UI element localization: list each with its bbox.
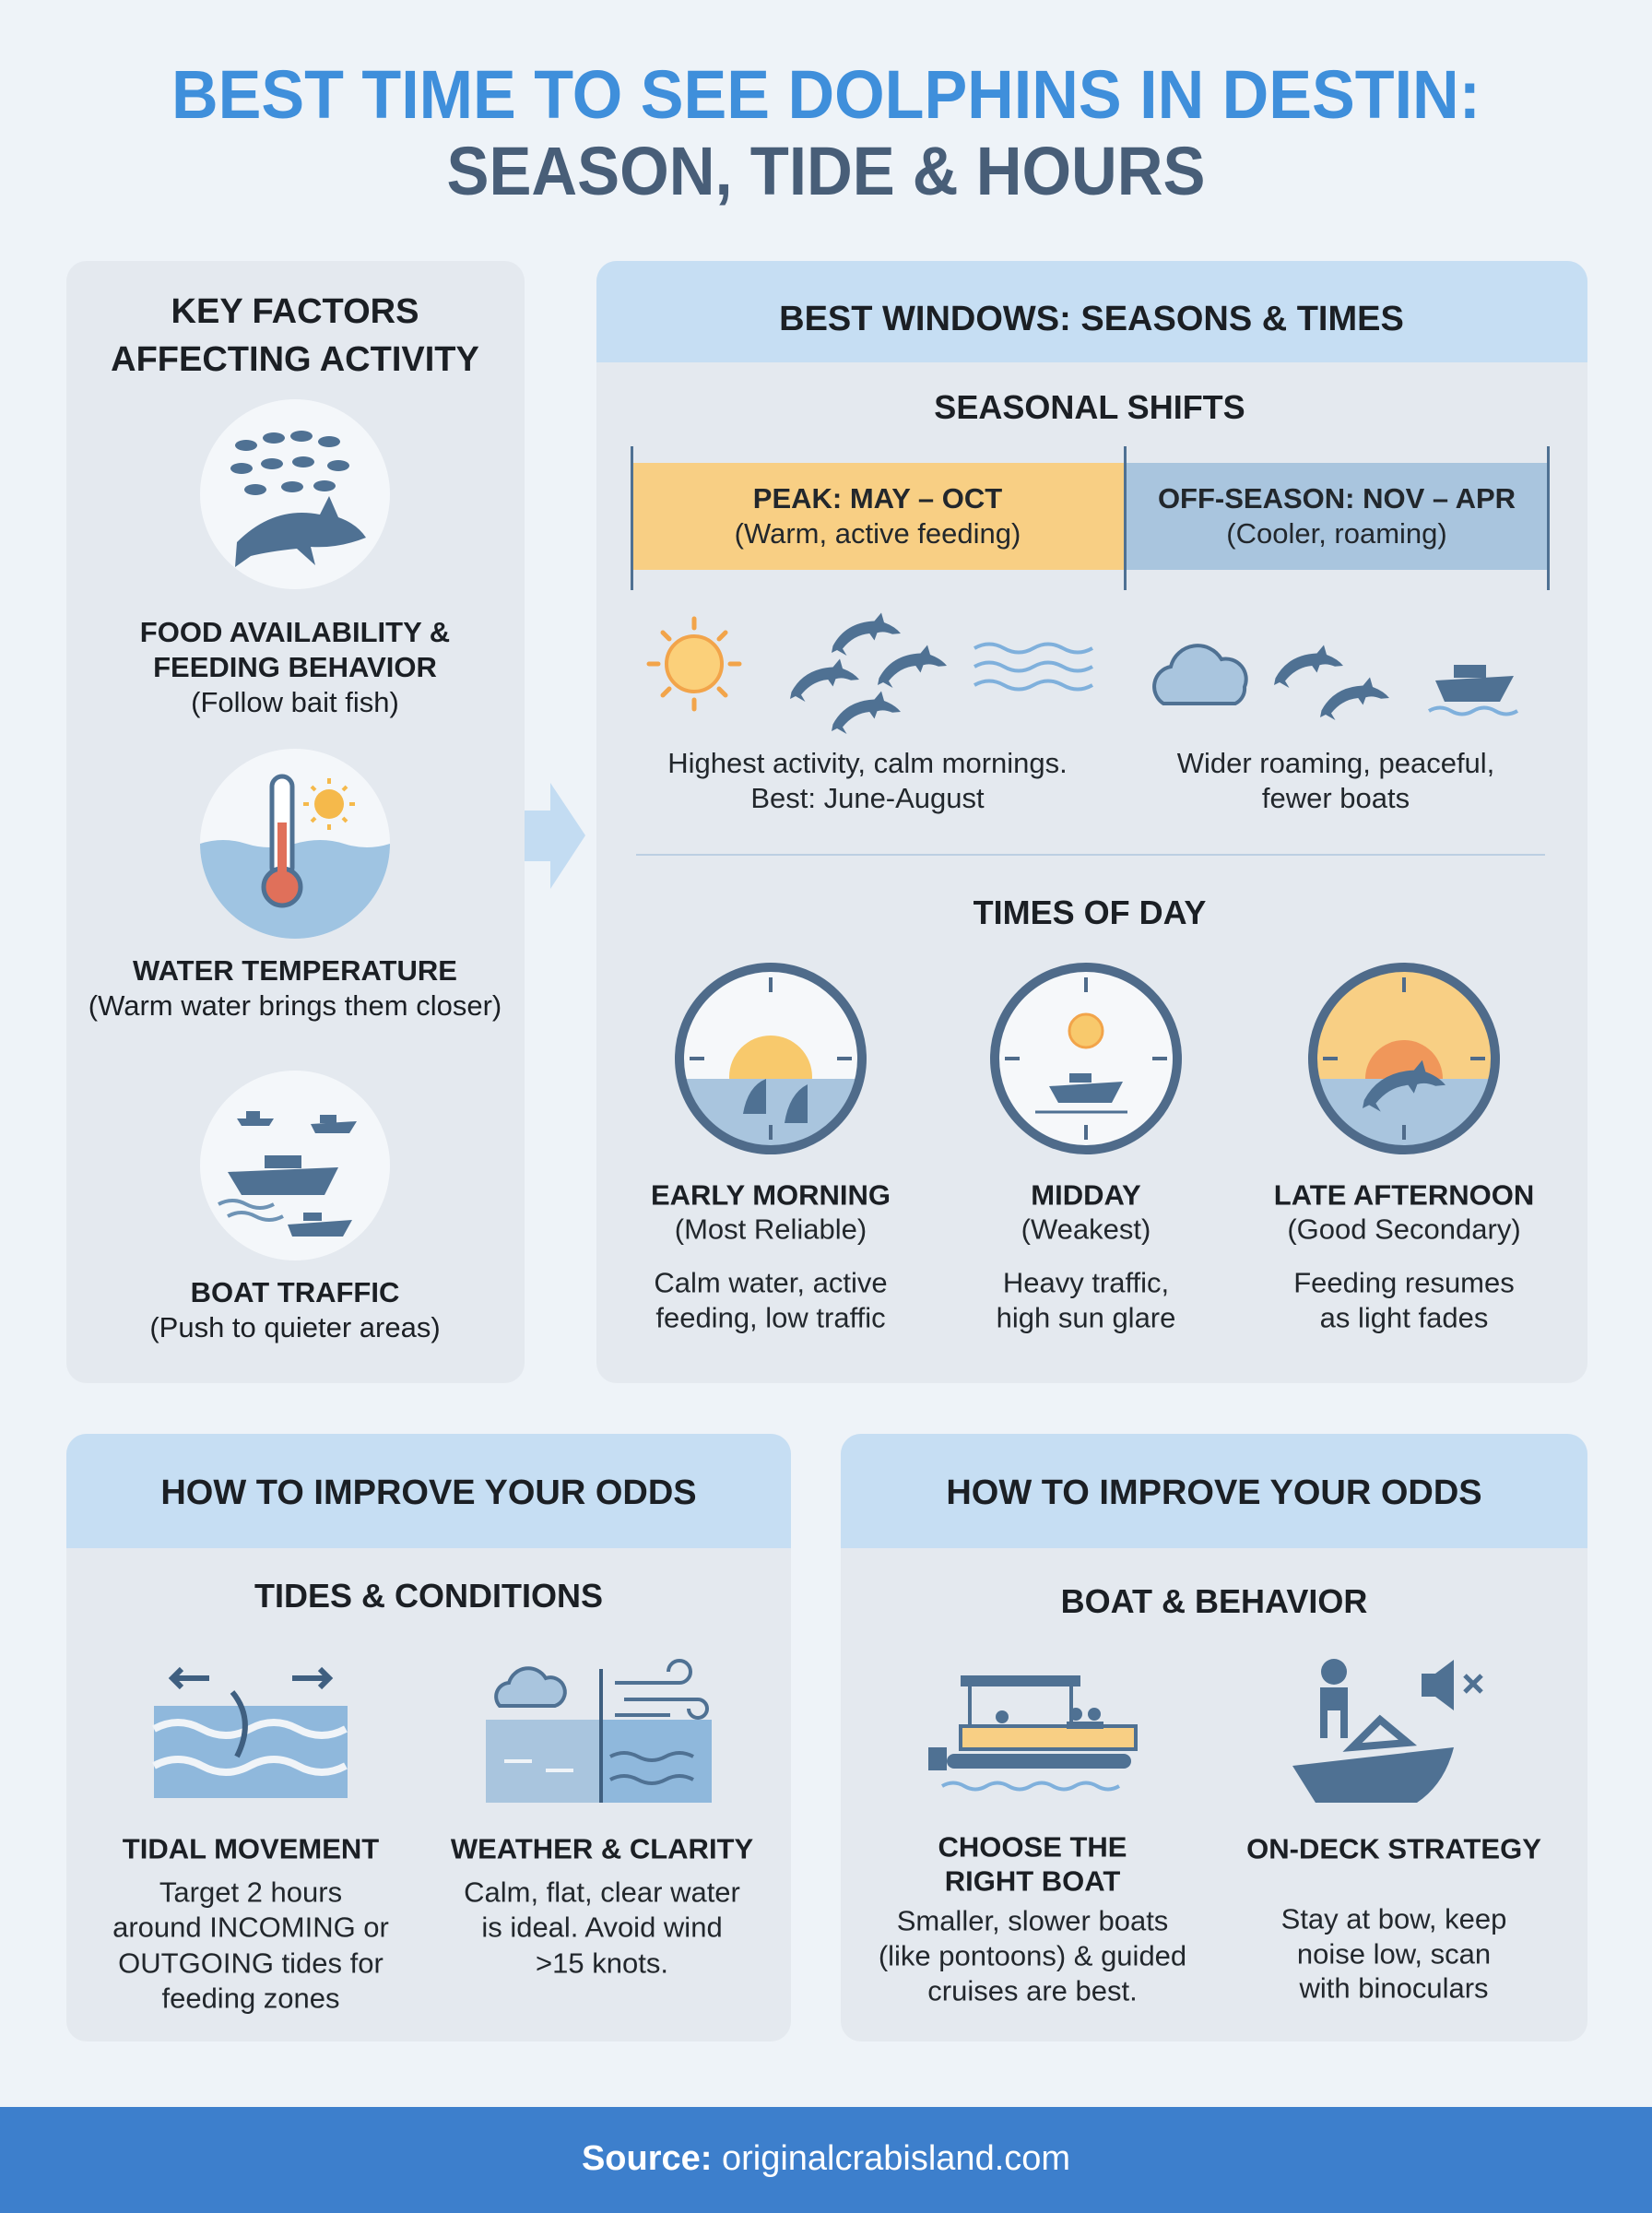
weather text: >15 knots. [536,1947,668,1979]
off-season label [1158,482,1516,550]
heading: key factors: AFFECTING ACTIVITY [111,340,479,379]
heading: HOW TO IMPROVE YOUR ODDS [946,1473,1482,1512]
title [171,56,1481,209]
weather text: is ideal. Avoid wind [481,1911,723,1944]
water temperature label [88,954,502,1022]
off-season description: fewer boats [1262,782,1410,814]
footer: source [0,2107,1652,2213]
choose the right boat text: cruises are best. [927,1975,1138,2006]
food label [140,616,450,718]
early morning label: Calm water, active [654,1267,888,1298]
clock: midday [990,963,1182,1154]
peak description: Best: June-August [750,782,985,814]
choose the right boat text: RIGHT BOAT [945,1864,1120,1898]
food label: (Follow bait fish) [191,686,399,718]
panel: boat & behavior [841,1434,1587,2041]
weather text: Calm, flat, clear water [464,1876,740,1909]
clock: early morning [675,963,867,1154]
off-season description [1176,747,1494,814]
tidal movement text: feeding zones [161,1982,340,2014]
heading: HOW TO IMPROVE YOUR ODDS [160,1473,697,1512]
icon: boats [200,1071,390,1260]
icon: tidal movement [153,1667,348,1798]
late afternoon label: Feeding resumes [1293,1267,1515,1298]
subheading: seasonal shifts: SEASONAL SHIFTS [934,388,1245,426]
off-season description: Wider roaming, peaceful, [1177,747,1494,779]
heading: key factors [111,292,479,379]
weather text: WEATHER & CLARITY [451,1833,753,1864]
panel: key factors [66,261,525,1383]
tidal movement text: TIDAL MOVEMENT [123,1833,379,1864]
peak label: PEAK: MAY – OCT [753,482,1002,515]
midday label: (Weakest) [1021,1213,1150,1245]
off-season label: (Cooler, roaming) [1226,517,1447,550]
choose the right boat text: (like pontoons) & guided [879,1940,1186,1971]
clock: late afternoon [1308,963,1500,1154]
off-season label: OFF-SEASON: NOV – APR [1158,482,1516,515]
tidal movement text [112,1833,389,2014]
early morning label: feeding, low traffic [655,1302,886,1333]
midday label: high sun glare [997,1302,1175,1333]
on-deck strategy text: ON-DECK STRATEGY [1246,1833,1541,1864]
food label: FEEDING BEHAVIOR [153,651,437,683]
heading: key factors: KEY FACTORS [171,292,419,331]
midday label [997,1178,1175,1333]
choose the right boat text [879,1831,1186,2006]
arrow [525,783,585,889]
peak description [667,747,1068,814]
early morning label: EARLY MORNING [651,1178,891,1212]
heading: best windows: BEST WINDOWS: SEASONS & TIMES [779,300,1404,338]
tidal movement text: OUTGOING tides for [118,1947,384,1979]
peak description: Highest activity, calm mornings. [667,747,1068,779]
subheading: BOAT & BEHAVIOR [1061,1582,1367,1620]
boat traffic label: (Push to quieter areas) [149,1311,441,1343]
water temperature label: (Warm water brings them closer) [88,989,502,1022]
on-deck strategy text: Stay at bow, keep [1281,1903,1506,1935]
boat traffic label [149,1276,441,1343]
subheading: times of day: TIMES OF DAY [974,893,1206,931]
on-deck strategy text: with binoculars [1299,1971,1489,2005]
on-deck strategy text [1246,1833,1541,2005]
icon: thermometer [200,749,390,939]
icon: fish school [200,399,390,589]
boat traffic label: BOAT TRAFFIC [191,1276,399,1308]
icon: weather & clarity [486,1659,712,1803]
late afternoon label: LATE AFTERNOON [1274,1178,1534,1212]
season bar [631,446,1550,590]
food label: FOOD AVAILABILITY & [140,616,450,648]
tidal movement text: around INCOMING or [112,1911,389,1944]
title: SEASON, TIDE & HOURS [446,133,1206,209]
peak label [735,482,1021,550]
midday label: Heavy traffic, [1003,1267,1169,1298]
icons: off season [1152,644,1518,720]
icon: pontoon boat [928,1675,1138,1791]
title: BEST TIME TO SEE DOLPHINS IN DESTIN: [171,56,1481,133]
peak label: (Warm, active feeding) [735,517,1021,550]
midday label: MIDDAY [1031,1178,1141,1212]
early morning label [651,1178,891,1333]
choose the right boat text: CHOOSE THE [938,1831,1127,1863]
panel: tides & conditions [66,1434,791,2041]
header band [596,261,1587,362]
late afternoon label [1274,1178,1534,1333]
footer: source: Source: originalcrabisland.com [582,2139,1070,2178]
tidal movement text: Target 2 hours [159,1876,342,1909]
water temperature label: WATER TEMPERATURE [133,954,457,987]
icons: peak season [647,612,1093,734]
weather text [450,1833,753,1979]
subheading: TIDES & CONDITIONS [254,1577,603,1615]
panel: best windows [596,261,1587,1383]
choose the right boat text: Smaller, slower boats [897,1905,1168,1936]
icon: on-deck [1292,1659,1483,1803]
late afternoon label: as light fades [1320,1302,1488,1333]
late afternoon label: (Good Secondary) [1287,1213,1521,1245]
on-deck strategy text: noise low, scan [1297,1938,1491,1970]
early morning label: (Most Reliable) [675,1213,867,1245]
